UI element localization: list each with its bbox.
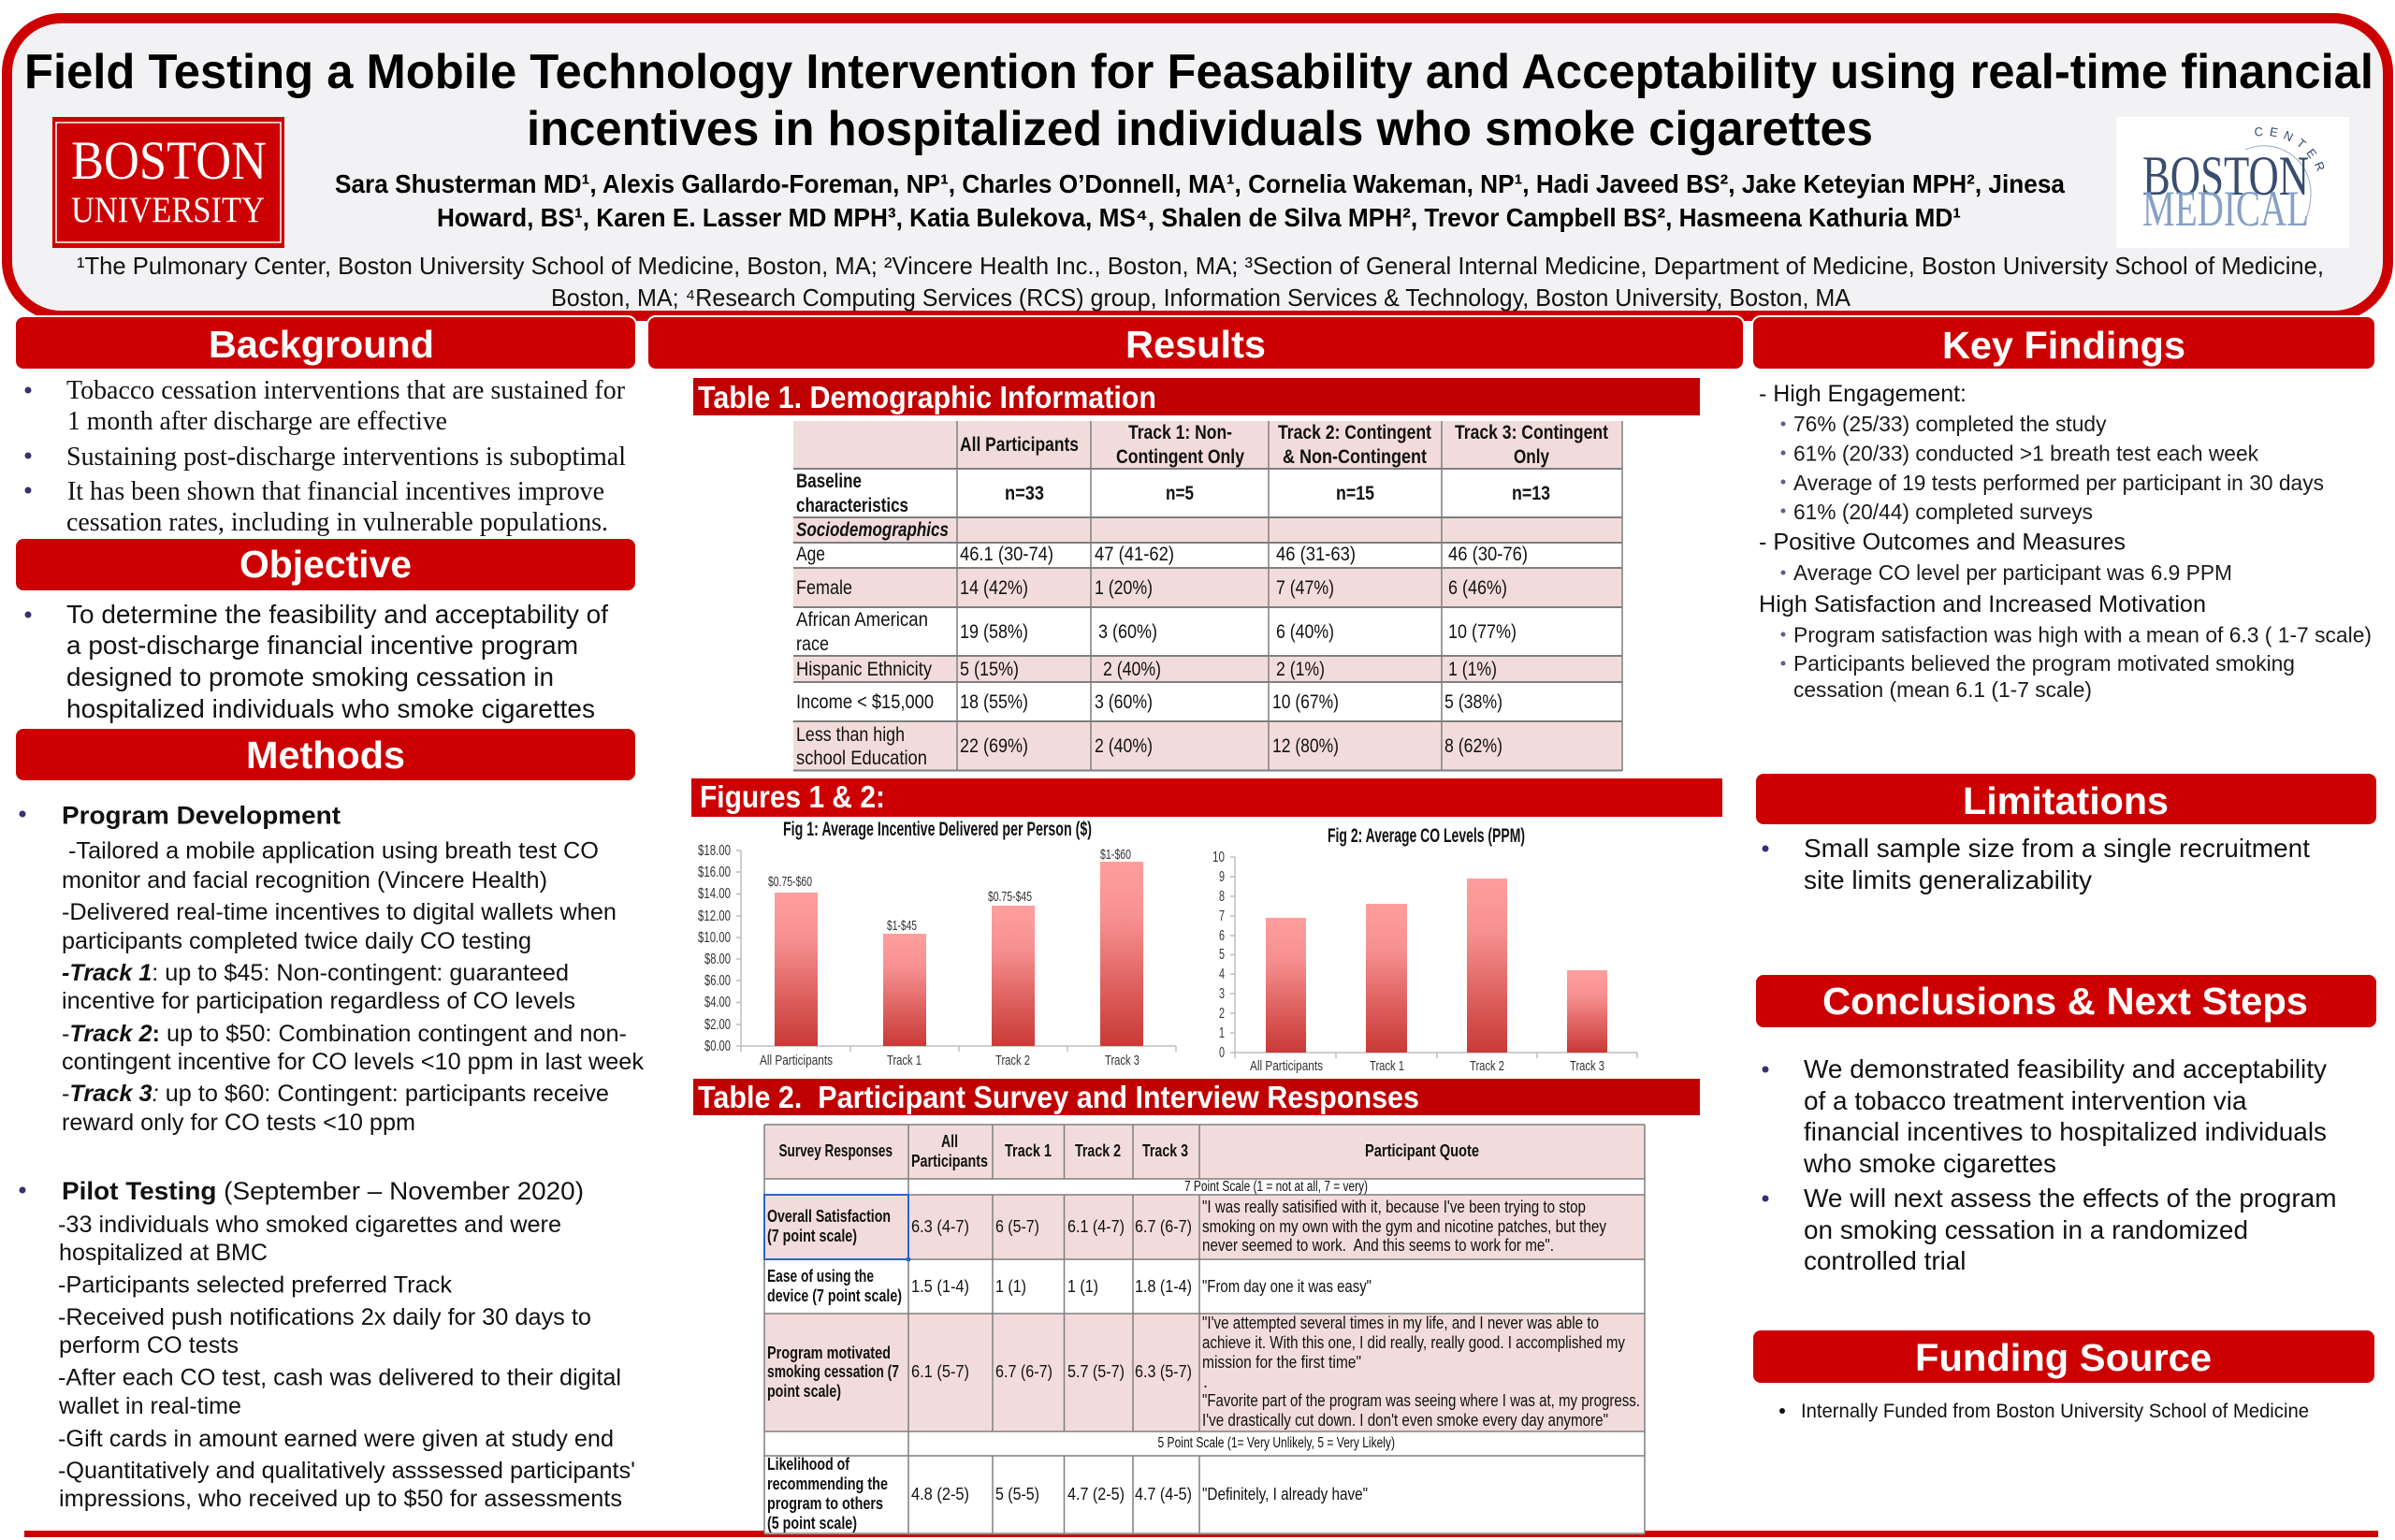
chart: fig 1 average incentive: Track 3 — [1105, 1053, 1139, 1068]
chart: fig 1 average incentive: $0.75-$45 — [988, 889, 1032, 905]
panel: methods — [15, 728, 645, 1512]
table 2: survey and interview responses: smoking on my own with the gym and nicotine patches, but they — [1202, 1217, 1606, 1236]
heading: methods — [15, 728, 636, 781]
table 2: survey and interview responses: 1.5 (1-4) — [911, 1277, 969, 1296]
table 2: survey and interview responses: (7 point scale) — [767, 1227, 857, 1245]
text block: program development: participants completed twice daily CO testing — [62, 928, 531, 954]
panel: background: Tobacco cessation interventions that are sustained for — [66, 375, 625, 405]
panel: background — [15, 316, 636, 537]
table 2: survey and interview responses: 1 (1) — [1067, 1277, 1098, 1296]
panel: key findings: - High Engagement: — [1759, 381, 1967, 407]
table 2: survey and interview responses: 5.7 (5-7) — [1067, 1362, 1125, 1381]
panel: key findings: Average of 19 tests performed per participant in 30 days — [1793, 471, 2324, 495]
panel: key findings: 61% (20/44) completed surveys — [1793, 500, 2093, 524]
chart: fig 2 average CO levels: 10 — [1212, 850, 1225, 865]
heading: key findings — [1752, 316, 2375, 370]
table 1: demographic information: & Non-Contingent — [1283, 446, 1427, 468]
panel: conclusions and next steps: of a tobacco treatment intervention via — [1804, 1086, 2247, 1115]
heading: figures: Figures 1 & 2: — [700, 779, 885, 814]
table 2: survey and interview responses: 6.1 (5-7) — [911, 1362, 969, 1381]
panel: limitations: site limits generalizability — [1804, 865, 2092, 894]
text block: pilot testing: -33 individuals who smoked cigarettes and were — [58, 1212, 561, 1238]
heading: limitations — [1755, 773, 2377, 825]
chart: fig 1 average incentive: $14.00 — [698, 886, 731, 902]
table 2: survey and interview responses: Track 2 — [1075, 1141, 1121, 1160]
table 1: demographic information: Income < $15,000 — [796, 691, 934, 713]
text block: pilot testing: hospitalized at BMC — [59, 1240, 268, 1266]
table 1: demographic information: Less than high — [796, 724, 905, 746]
table 1: demographic information: 46 (30-76) — [1448, 544, 1528, 565]
text block: program development: -Track 3: up to $60: Contingent: participants receive — [62, 1081, 609, 1107]
panel: key findings: Participants believed the program motivated smoking — [1793, 651, 2295, 676]
table 2: survey and interview responses: Survey Responses — [778, 1141, 893, 1160]
table 2: survey and interview responses: All — [941, 1132, 958, 1151]
chart: fig 1 average incentive: $10.00 — [698, 930, 731, 946]
table 1: demographic information: 47 (41-62) — [1095, 544, 1174, 565]
heading: figures — [691, 778, 1722, 817]
chart: fig 2 average CO levels: 0 — [1219, 1045, 1225, 1061]
panel: objective: a post-discharge financial incentive program — [66, 631, 578, 660]
table 2: survey and interview responses: "Favorite part of the program was seeing where I was at, my progress. — [1202, 1391, 1640, 1410]
panel: conclusions and next steps: controlled trial — [1804, 1246, 1967, 1275]
table 1: demographic information: Age — [796, 544, 825, 565]
chart: fig 2 average CO levels — [1212, 825, 1637, 1074]
chart: fig 2 average CO levels: All Participants — [1250, 1058, 1323, 1074]
chart: fig 1 average incentive — [698, 819, 1176, 1068]
table 1: demographic information: Baseline — [796, 471, 862, 492]
heading: objective: Objective — [240, 543, 412, 586]
table 1: demographic information: 3 (60%) — [1098, 621, 1157, 643]
logo: Boston University: BOSTON — [71, 130, 267, 191]
text block: pilot testing: -Quantitatively and qualitatively asssessed participants' — [58, 1458, 635, 1484]
table 1: demographic information: characteristics — [796, 495, 908, 516]
chart: fig 1 average incentive: $2.00 — [704, 1017, 731, 1033]
heading: table 1 — [693, 378, 1700, 415]
table 1: demographic information: 2 (40%) — [1103, 659, 1161, 680]
table 1: demographic information: 19 (58%) — [960, 621, 1028, 643]
text block: pilot testing: -Gift cards in amount earned were given at study end — [58, 1426, 614, 1452]
table 1: demographic information: n=15 — [1336, 483, 1374, 504]
heading: table 1: Table 1. Demographic Information — [698, 380, 1156, 414]
table 1: demographic information: 12 (80%) — [1272, 735, 1339, 757]
table 2: survey and interview responses — [764, 1125, 1645, 1534]
text block: program development: contingent incentive for CO levels <10 ppm in last week — [62, 1049, 645, 1075]
table 1: demographic information: 46.1 (30-74) — [960, 544, 1053, 565]
heading: table 2: Table 2. Participant Survey and Interview Responses — [698, 1080, 1419, 1114]
table 2: survey and interview responses: recommending the — [767, 1475, 888, 1493]
table 1: demographic information: 6 (46%) — [1448, 577, 1507, 599]
chart: fig 2 average CO levels: 2 — [1219, 1006, 1225, 1022]
table 2: survey and interview responses: 6.7 (6-7) — [995, 1362, 1052, 1381]
panel: objective: hospitalized individuals who smoke cigarettes — [66, 694, 595, 723]
heading: conclusions and next steps — [1755, 974, 2377, 1028]
table 2: survey and interview responses: Overall Satisfaction — [767, 1207, 891, 1226]
logo: Boston University: UNIVERSITY — [71, 190, 265, 230]
text block: pilot testing: -Received push notifications 2x daily for 30 days to — [58, 1304, 591, 1330]
text block: pilot testing: wallet in real-time — [58, 1393, 241, 1419]
table 1: demographic information: race — [796, 633, 829, 655]
panel: conclusions and next steps: We will next assess the effects of the program — [1804, 1184, 2337, 1213]
heading: objective — [15, 538, 636, 591]
table 2: survey and interview responses: Track 3 — [1142, 1141, 1188, 1160]
table 1: demographic information: Track 2: Contingent — [1278, 422, 1431, 443]
chart: fig 2 average CO levels: 4 — [1219, 966, 1225, 982]
table 1: demographic information: 2 (40%) — [1095, 735, 1153, 757]
panel: background: Sustaining post-discharge interventions is suboptimal — [66, 442, 626, 472]
authors: Sara Shusterman MD¹, Alexis Gallardo-Foreman, NP¹, Charles O’Donnell, MA¹, Cornelia Wakeman, NP¹, Hadi Javeed BS², Jake Keteyian MPH², Jinesa — [335, 169, 2065, 198]
chart: fig 1 average incentive: $8.00 — [704, 952, 731, 967]
table 1: demographic information — [793, 421, 1622, 771]
text block: pilot testing: -Participants selected preferred Track — [58, 1272, 452, 1299]
table 1: demographic information: 1 (1%) — [1448, 659, 1497, 680]
text block: pilot testing — [19, 1177, 635, 1512]
table 1: demographic information: 7 (47%) — [1276, 577, 1334, 599]
chart: fig 1 average incentive: $4.00 — [704, 995, 731, 1010]
table 2: survey and interview responses: 4.7 (4-5) — [1135, 1485, 1192, 1504]
table 2: survey and interview responses: 5 (5-5) — [995, 1485, 1039, 1504]
authors: Howard, BS¹, Karen E. Lasser MD MPH³, Katia Bulekova, MS⁴, Shalen de Silva MPH², Trevor Campbell BS², Hasmeena Kathuria MD¹ — [437, 203, 1961, 232]
chart: fig 2 average CO levels: Track 3 — [1570, 1058, 1604, 1074]
table 1: demographic information: 18 (55%) — [960, 691, 1028, 713]
chart: fig 1 average incentive: $12.00 — [698, 908, 731, 924]
title: Field Testing a Mobile Technology Intervention for Feasability and Acceptability using real-time financial — [24, 45, 2373, 99]
panel: key findings — [1752, 316, 2375, 702]
table 2: survey and interview responses: Program motivated — [767, 1344, 891, 1362]
table 1: demographic information: Only — [1514, 446, 1549, 468]
chart: fig 1 average incentive: $1-$60 — [1100, 847, 1131, 863]
table 1: demographic information: African American — [796, 609, 928, 631]
authors — [335, 169, 2065, 232]
table 2: survey and interview responses: device (7 point scale) — [767, 1286, 902, 1305]
affiliations: ¹The Pulmonary Center, Boston University School of Medicine, Boston, MA; ²Vincere Health Inc., Boston, MA; ³Section of General Internal Medicine, Department of Medicine, Boston University School of Medicine, — [77, 252, 2324, 280]
chart: fig 1 average incentive: $1-$45 — [887, 918, 917, 934]
header banner — [2, 13, 2393, 321]
chart: fig 2 average CO levels: 8 — [1219, 889, 1225, 905]
text block: program development: -Track 1: up to $45: Non-contingent: guaranteed — [62, 960, 569, 986]
chart: fig 1 average incentive: Track 1 — [887, 1053, 922, 1068]
table 2: survey and interview responses: Track 1 — [1005, 1141, 1052, 1160]
table 2: survey and interview responses: Participants — [911, 1152, 988, 1170]
panel: objective — [15, 538, 636, 723]
heading: funding source: Funding Source — [1915, 1336, 2212, 1379]
table 1: demographic information: Track 1: Non- — [1128, 422, 1232, 443]
table 2: survey and interview responses: 6.1 (4-7) — [1067, 1217, 1125, 1236]
title: incentives in hospitalized individuals who smoke cigarettes — [527, 102, 1873, 156]
panel: funding source — [1752, 1329, 2375, 1422]
chart: fig 2 average CO levels: 6 — [1219, 928, 1225, 944]
table 2: survey and interview responses: 1.8 (1-4) — [1135, 1277, 1192, 1296]
table 1: demographic information: All Participants — [960, 434, 1079, 456]
chart: fig 2 average CO levels: 7 — [1219, 908, 1225, 924]
table 2: survey and interview responses: Participant Quote — [1365, 1141, 1479, 1160]
table 2: survey and interview responses: Likelihood of — [767, 1455, 850, 1474]
panel: limitations — [1755, 773, 2377, 894]
panel: conclusions and next steps: financial incentives to hospitalized individuals — [1804, 1117, 2327, 1146]
affiliations — [77, 252, 2324, 312]
chart: fig 1 average incentive: $16.00 — [698, 864, 731, 880]
affiliations: Boston, MA; ⁴Research Computing Services (RCS) group, Information Services & Technology, Boston University, Boston, MA — [551, 283, 1851, 312]
heading: background — [15, 316, 636, 370]
table 1: demographic information: Female — [796, 577, 852, 599]
chart: fig 2 average CO levels: 3 — [1219, 986, 1225, 1002]
chart: fig 2 average CO levels: Track 2 — [1470, 1058, 1504, 1074]
heading: methods: Methods — [246, 734, 405, 777]
title — [24, 45, 2373, 156]
logo: Boston University — [52, 117, 284, 248]
panel: funding source: Internally Funded from Boston University School of Medicine — [1801, 1401, 2309, 1422]
table 2: survey and interview responses: "From day one it was easy" — [1202, 1277, 1372, 1296]
panel: background: It has been shown that financial incentives improve — [67, 476, 604, 506]
panel: conclusions and next steps — [1755, 974, 2377, 1275]
panel: key findings: High Satisfaction and Increased Motivation — [1759, 591, 2206, 617]
table 2: survey and interview responses: 6.3 (4-7) — [911, 1217, 969, 1236]
text block: program development: -Delivered real-time incentives to digital wallets when — [62, 899, 617, 925]
table 1: demographic information: 8 (62%) — [1444, 735, 1502, 757]
table 2: survey and interview responses: . — [1203, 1373, 1208, 1391]
text block: program development: -Track 2: up to $50: Combination contingent and non- — [62, 1021, 627, 1047]
text block: pilot testing: Pilot Testing (September – November 2020) — [62, 1177, 584, 1205]
chart: fig 2 average CO levels: 9 — [1219, 869, 1225, 885]
chart: fig 1 average incentive: Track 2 — [995, 1053, 1030, 1068]
bottom rule — [24, 1531, 2378, 1537]
panel: conclusions and next steps: We demonstrated feasibility and acceptability — [1804, 1054, 2327, 1083]
panel: key findings: - Positive Outcomes and Measures — [1759, 530, 2126, 556]
heading: limitations: Limitations — [1963, 779, 2169, 822]
table 2: survey and interview responses: (5 point scale) — [767, 1514, 857, 1533]
table 2: survey and interview responses: "I've attempted several times in my life, and I never was able to — [1202, 1314, 1599, 1332]
table 1: demographic information: 10 (77%) — [1448, 621, 1517, 643]
table 1: demographic information: 46 (31-63) — [1276, 544, 1356, 565]
text block: program development: -Tailored a mobile application using breath test CO — [68, 838, 599, 864]
table 1: demographic information: 1 (20%) — [1095, 577, 1153, 599]
text block: program development — [19, 801, 645, 1136]
heading: conclusions and next steps: Conclusions & Next Steps — [1822, 980, 2308, 1023]
panel: background: 1 month after discharge are effective — [67, 406, 447, 436]
table 2: survey and interview responses: program to others — [767, 1494, 883, 1513]
chart: fig 2 average CO levels: 5 — [1219, 947, 1225, 963]
panel: conclusions and next steps: who smoke cigarettes — [1803, 1149, 2056, 1178]
table 2: survey and interview responses: 6 (5-7) — [995, 1217, 1039, 1236]
table 2: survey and interview responses: 4.8 (2-5) — [911, 1485, 969, 1504]
chart: fig 1 average incentive: All Participants — [760, 1053, 833, 1068]
table 1: demographic information: Hispanic Ethnicity — [796, 659, 932, 680]
panel: key findings: Program satisfaction was high with a mean of 6.3 ( 1-7 scale) — [1793, 623, 2372, 647]
table 2: survey and interview responses: smoking cessation (7 — [767, 1362, 899, 1381]
table 2: survey and interview responses: I've drastically cut down. I don't even smoke every day anymore" — [1202, 1411, 1608, 1430]
heading: background: Background — [209, 323, 434, 366]
heading: funding source — [1752, 1329, 2375, 1384]
panel: key findings: 61% (20/33) conducted >1 breath test each week — [1793, 442, 2258, 466]
chart: fig 2 average CO levels: Track 1 — [1370, 1058, 1404, 1074]
table 1: demographic information: Contingent Only — [1116, 446, 1244, 468]
panel: conclusions and next steps: on smoking cessation in a randomized — [1804, 1215, 2248, 1244]
text block: pilot testing: perform CO tests — [59, 1332, 239, 1358]
table 2: survey and interview responses: "Definitely, I already have" — [1202, 1485, 1368, 1504]
panel: key findings: 76% (25/33) completed the study — [1793, 412, 2107, 436]
table 2: survey and interview responses: 4.7 (2-5) — [1067, 1485, 1125, 1504]
table 2: survey and interview responses: "I was really satisified with it, because I've been trying to stop — [1202, 1198, 1586, 1216]
panel: limitations: Small sample size from a single recruitment — [1804, 834, 2310, 863]
chart: fig 1 average incentive: Fig 1: Average Incentive Delivered per Person ($) — [783, 819, 1092, 840]
table 1: demographic information: Sociodemographics — [796, 519, 949, 541]
text block: pilot testing: impressions, who received up to $50 for assessments — [59, 1486, 622, 1512]
panel: key findings: cessation (mean 6.1 (1-7 scale) — [1793, 677, 2092, 702]
logo: Boston Medical Center — [2116, 117, 2349, 248]
chart: fig 1 average incentive: $18.00 — [698, 843, 731, 859]
panel: objective: designed to promote smoking cessation in — [66, 662, 554, 691]
text block: program development: monitor and facial recognition (Vincere Health) — [62, 867, 547, 893]
table 2: survey and interview responses: mission for the first time" — [1202, 1353, 1361, 1372]
table 1: demographic information: n=13 — [1512, 483, 1550, 504]
text block: program development: Program Development — [62, 801, 341, 829]
table 2: survey and interview responses: 5 Point Scale (1= Very Unlikely, 5 = Very Likely) — [1158, 1435, 1395, 1451]
table 1: demographic information: school Education — [796, 748, 927, 769]
panel: key findings: Average CO level per participant was 6.9 PPM — [1793, 560, 2232, 585]
table 1: demographic information: 14 (42%) — [960, 577, 1028, 599]
table 1: demographic information: 5 (38%) — [1444, 691, 1502, 713]
table 1: demographic information: 3 (60%) — [1095, 691, 1153, 713]
chart: fig 1 average incentive: $0.75-$60 — [768, 874, 812, 890]
table 1: demographic information: n=5 — [1166, 483, 1194, 504]
heading: key findings: Key Findings — [1942, 324, 2185, 367]
table 1: demographic information: 6 (40%) — [1276, 621, 1334, 643]
table 2: survey and interview responses: never seemed to work. And this seems to work for me". — [1202, 1236, 1554, 1255]
table 2: survey and interview responses: Ease of using the — [767, 1267, 874, 1286]
table 2: survey and interview responses: point scale) — [767, 1382, 841, 1401]
text block: program development: reward only for CO tests <10 ppm — [62, 1110, 415, 1136]
table 1: demographic information: 5 (15%) — [960, 659, 1019, 680]
table 1: demographic information: 22 (69%) — [960, 735, 1028, 757]
table 2: survey and interview responses: 7 Point Scale (1 = not at all, 7 = very) — [1184, 1179, 1368, 1195]
chart: fig 1 average incentive: $0.00 — [704, 1039, 731, 1054]
panel: background: cessation rates, including in vulnerable populations. — [66, 507, 608, 537]
chart: fig 1 average incentive: $6.00 — [704, 973, 731, 989]
text block: program development: incentive for participation regardless of CO levels — [62, 988, 575, 1014]
table 1: demographic information: 10 (67%) — [1272, 691, 1339, 713]
table 2: survey and interview responses: achieve it. With this one, I did really, really good. I accomplished my — [1202, 1333, 1625, 1352]
text block: pilot testing: -After each CO test, cash was delivered to their digital — [58, 1364, 621, 1390]
table 2: survey and interview responses: 6.3 (5-7) — [1135, 1362, 1192, 1381]
logo: Boston Medical Center: CENTER — [2255, 127, 2324, 172]
table 1: demographic information: n=33 — [1005, 483, 1044, 504]
logo: Boston Medical Center: BOSTON — [2142, 145, 2309, 207]
table 2: survey and interview responses: 6.7 (6-7) — [1135, 1217, 1192, 1236]
heading: results: Results — [1125, 323, 1266, 366]
chart: fig 2 average CO levels: 1 — [1219, 1025, 1225, 1041]
panel: objective: To determine the feasibility and acceptability of — [66, 600, 608, 629]
table 1: demographic information: 2 (1%) — [1276, 659, 1325, 680]
chart: fig 2 average CO levels: Fig 2: Average CO Levels (PPM) — [1328, 825, 1525, 847]
table 1: demographic information: Track 3: Contingent — [1455, 422, 1608, 443]
logo: Boston Medical Center: MEDICAL — [2142, 181, 2309, 237]
table 2: survey and interview responses: 1 (1) — [995, 1277, 1026, 1296]
heading: results — [647, 316, 1744, 370]
